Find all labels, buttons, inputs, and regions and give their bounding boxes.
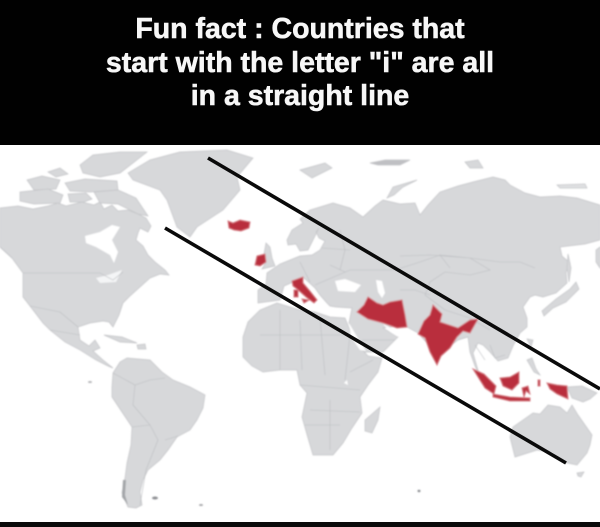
land: islands of Asia-Pacific — [104, 160, 600, 477]
land: North America — [0, 150, 600, 508]
country: Iceland — [228, 220, 250, 231]
land: Arctic islands — [20, 152, 148, 216]
title: start with the letter "i" are all — [106, 46, 494, 78]
land: Africa — [243, 303, 382, 455]
small dark map details — [88, 381, 420, 506]
title — [106, 13, 494, 112]
diagonal line: lower — [165, 228, 566, 463]
country: Indonesia — [473, 369, 568, 401]
diagonal line: upper — [208, 158, 600, 389]
land: Australia — [510, 405, 592, 465]
country: India — [418, 305, 478, 365]
land: Greenland — [128, 150, 253, 237]
country: Italy — [292, 277, 317, 303]
footer band — [0, 522, 600, 527]
water: lakes and inland seas — [85, 225, 398, 385]
header band — [0, 0, 600, 145]
highlighted countries — [228, 220, 568, 401]
land: Eurasia — [258, 177, 600, 377]
country: Ireland — [255, 254, 266, 266]
land: South America — [112, 358, 205, 508]
borders — [0, 230, 535, 505]
land: Madagascar — [365, 407, 380, 433]
country: Iran and Iraq — [357, 297, 407, 328]
title: in a straight line — [191, 80, 409, 112]
title: Fun fact : Countries that — [135, 13, 465, 45]
land: UK — [262, 243, 275, 269]
